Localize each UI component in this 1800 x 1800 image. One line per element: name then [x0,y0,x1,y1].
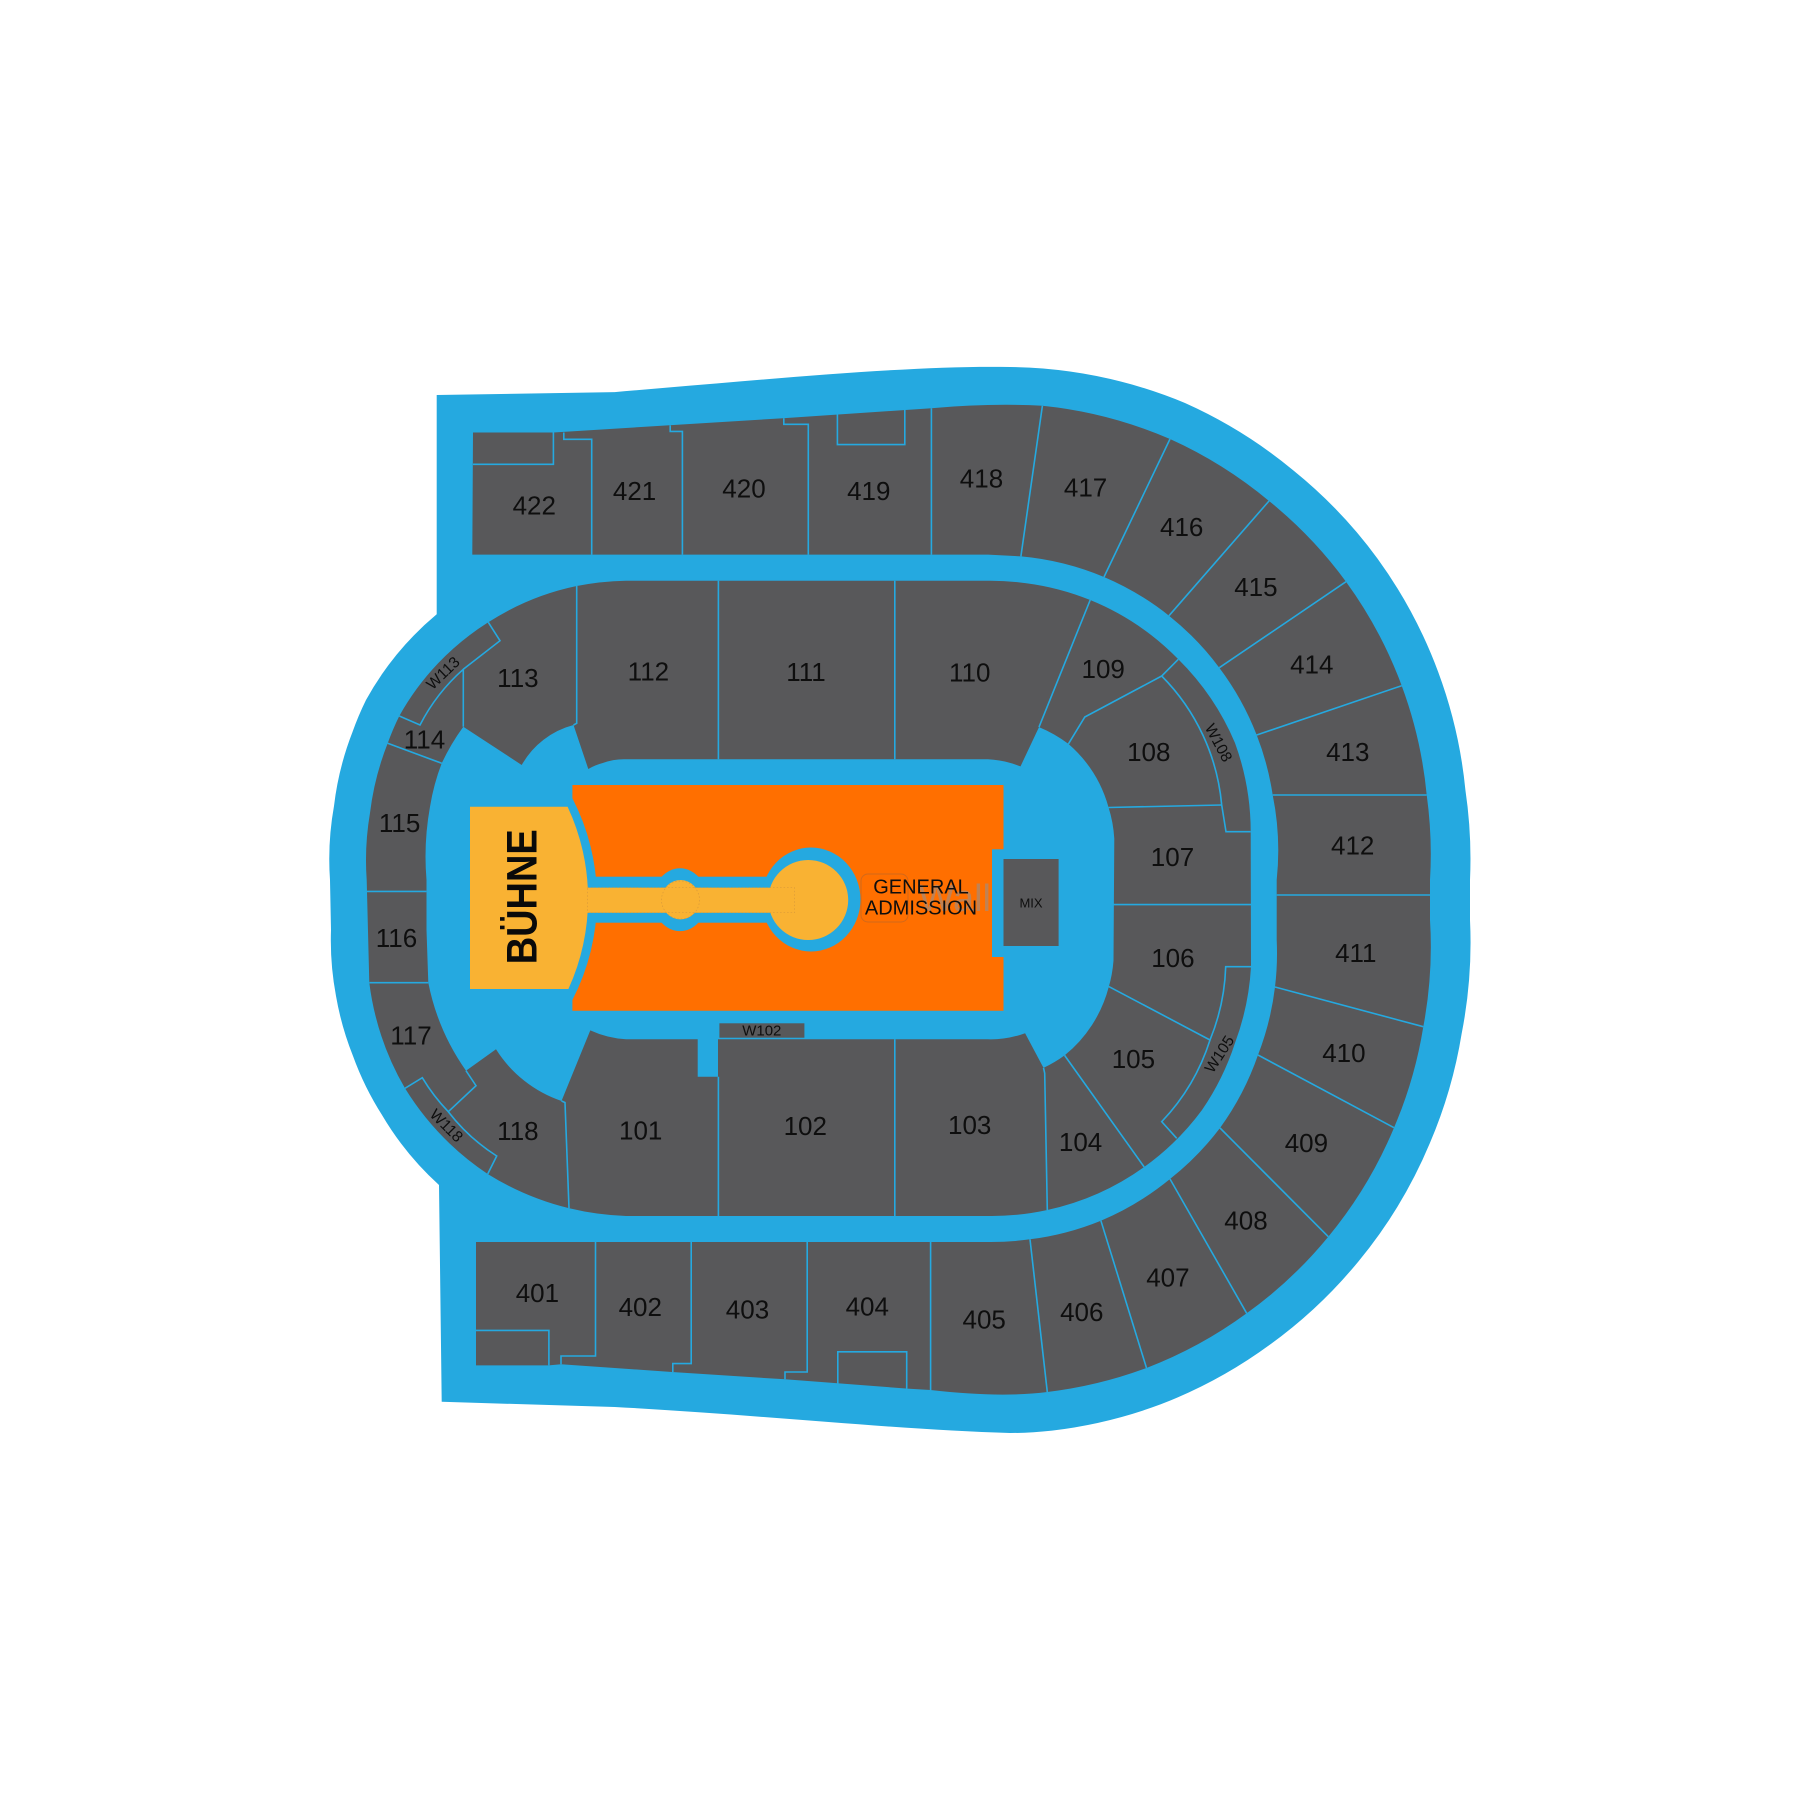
419: 419 [847,476,890,506]
403: 403 [726,1295,769,1325]
116: 116 [376,923,417,953]
panel: arena floor bowl [426,725,1114,1101]
101: 101 [619,1116,662,1146]
113: 113 [497,663,539,693]
panel: upper tier 400 sections [472,405,1431,1395]
103: 103 [948,1110,991,1140]
421: 421 [613,476,656,506]
407: 407 [1146,1262,1190,1292]
arena outline [329,367,1471,1433]
415: 415 [1234,572,1278,602]
107: 107 [1151,842,1194,872]
422: 422 [513,491,556,521]
409: 409 [1285,1128,1328,1158]
W118: W118 [426,1106,466,1146]
108: 108 [1127,737,1170,767]
109: 109 [1082,654,1125,684]
420: 420 [722,474,766,504]
mix position: MIX [1019,896,1043,910]
text: stage label: BÜHNE [498,829,546,964]
W113: W113 [423,654,464,693]
mix position [1004,859,1059,946]
405: 405 [963,1305,1006,1335]
110: 110 [949,658,990,688]
labels: lower tier [376,654,1195,1157]
104: 104 [1059,1127,1102,1157]
412: 412 [1331,831,1374,861]
418: 418 [960,464,1003,494]
111: 111 [786,657,826,687]
413: 413 [1326,737,1369,767]
115: 115 [379,808,420,838]
section dividers: upper tier [473,406,1430,1392]
panel: general admission floor [572,785,1004,1011]
runway moat [585,848,1004,957]
402: 402 [619,1292,662,1322]
410: 410 [1322,1038,1366,1068]
406: 406 [1060,1297,1103,1327]
105: 105 [1112,1044,1155,1074]
text: general admission: GENERAL [873,877,969,899]
watermark: Wall [919,878,991,920]
W108: W108 [1201,721,1235,765]
stage and runway [470,807,848,989]
118: 118 [497,1116,539,1146]
text: general admission: ADMISSION [865,897,977,919]
labels: wheelchair sections [423,654,1238,1146]
wheelchair platform W102: W102 [742,1022,781,1040]
runway dotted guides [588,881,795,919]
401: 401 [516,1278,559,1308]
416: 416 [1160,512,1203,542]
wheelchair platform W102 [719,1022,804,1040]
117: 117 [390,1021,432,1051]
text: general admission [865,877,977,919]
labels: upper tier [513,464,1377,1335]
watermark [861,874,991,922]
106: 106 [1151,943,1195,973]
panel: lower tier 100 sections [366,581,1251,1216]
411: 411 [1335,938,1377,968]
102: 102 [784,1111,827,1141]
112: 112 [628,656,669,686]
417: 417 [1064,472,1107,502]
408: 408 [1224,1206,1268,1236]
414: 414 [1290,650,1333,680]
W105: W105 [1202,1033,1238,1076]
114: 114 [404,725,445,755]
section dividers: lower tier [367,581,1251,1216]
404: 404 [846,1291,889,1321]
